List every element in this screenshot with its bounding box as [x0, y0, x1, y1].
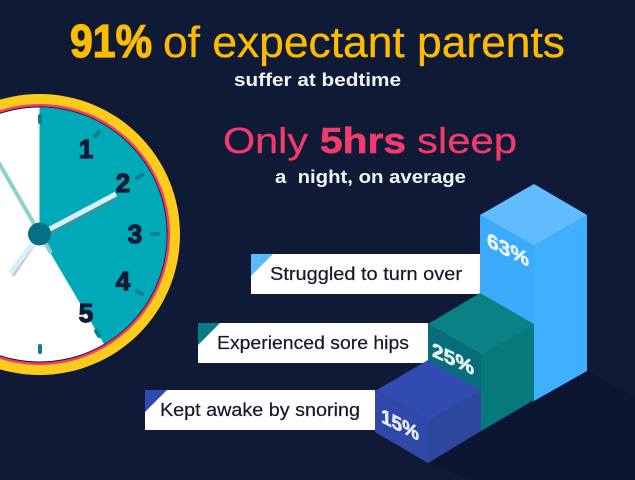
clock — [0, 94, 180, 375]
label: struggled — [251, 254, 480, 294]
bar chart shadow — [428, 371, 635, 480]
heading: sleep — [223, 120, 517, 161]
hour hand — [10, 234, 40, 273]
label: sore hips — [198, 323, 428, 363]
title: 91% — [70, 15, 152, 67]
heading: sleep: Only — [223, 120, 308, 161]
clock numbers: 3 — [128, 219, 142, 249]
label: struggled: Struggled to turn over — [270, 264, 462, 284]
bar: 25%: 25% — [432, 339, 474, 380]
clock numbers: 4 — [116, 266, 131, 296]
label: snoring — [145, 390, 375, 430]
heading: sleep: sleep — [417, 120, 517, 161]
heading: sleep: 5hrs — [320, 120, 406, 161]
minute hand — [40, 194, 116, 234]
clock face — [0, 108, 166, 362]
five hour wedge — [40, 107, 167, 344]
clock hub — [28, 222, 51, 246]
clock rim — [0, 94, 180, 375]
bar: 15% — [375, 360, 481, 463]
title: of expectant parents — [163, 18, 565, 67]
clock numbers: 5 — [79, 298, 93, 328]
clock numbers: 1 — [79, 134, 93, 164]
bar: 15%: 15% — [381, 405, 419, 446]
bar: 63% — [480, 184, 587, 401]
clock numbers — [79, 134, 142, 328]
second hand — [0, 158, 51, 253]
hour ticks — [40, 116, 158, 352]
bar: 25% — [428, 293, 534, 431]
subtitle: suffer at bedtime — [234, 70, 401, 90]
hand shadows — [13, 198, 117, 276]
label: snoring: Kept awake by snoring — [160, 400, 360, 420]
clock numbers: 2 — [116, 168, 130, 198]
sleep subheading: a night, on average — [275, 167, 466, 187]
bar: 63%: 63% — [487, 229, 529, 272]
label: sore hips: Experienced sore hips — [217, 333, 409, 353]
